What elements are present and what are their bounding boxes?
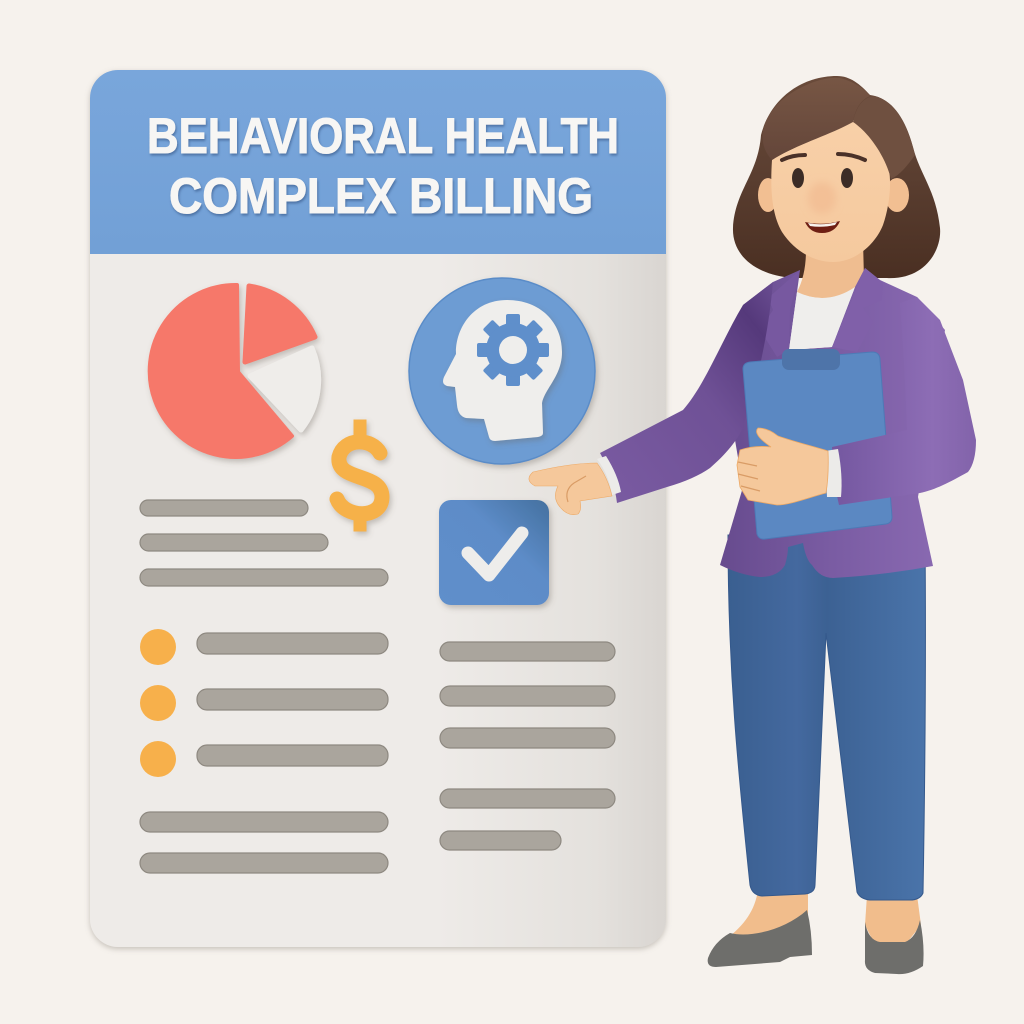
icon: pie chart [150, 285, 319, 457]
jacket torso [720, 268, 945, 578]
head silhouette [443, 300, 562, 441]
title: COMPLEX BILLING [169, 168, 593, 224]
hand on clipboard [737, 428, 828, 505]
legs and trousers [725, 535, 925, 945]
arm pointing [600, 282, 773, 503]
icon: checkbox [439, 500, 549, 605]
ears [758, 178, 778, 212]
pointing hand [529, 463, 612, 515]
shirt [789, 287, 855, 350]
nose [808, 182, 836, 214]
ankles [725, 890, 808, 945]
person presenter [529, 76, 976, 974]
mouth [805, 221, 840, 233]
head [771, 120, 890, 262]
clipboard [743, 349, 892, 539]
face [758, 78, 915, 262]
neck [797, 240, 864, 298]
eyes [792, 168, 804, 188]
clipboard clip [782, 349, 840, 370]
title [147, 108, 619, 224]
lapels [760, 270, 800, 357]
icon: head with gear [409, 278, 595, 464]
panel: billing document card [90, 70, 666, 947]
arm holding clipboard [832, 297, 976, 505]
text line placeholders: left intro [140, 500, 388, 586]
text line placeholders: right column [440, 642, 615, 850]
cuff left [597, 456, 621, 495]
eyebrows [782, 154, 865, 160]
cuff right [825, 449, 842, 497]
icon: dollar sign [337, 426, 382, 525]
text line placeholders: left footer [140, 812, 388, 873]
title: BEHAVIORAL HEALTH [147, 108, 619, 164]
gear [477, 314, 549, 386]
bullet list [140, 629, 388, 777]
panel header band [90, 70, 666, 254]
hair fringe [763, 78, 870, 160]
trousers [728, 535, 925, 900]
hair back [733, 76, 940, 278]
finger creases [738, 462, 760, 491]
shoes [708, 910, 924, 974]
